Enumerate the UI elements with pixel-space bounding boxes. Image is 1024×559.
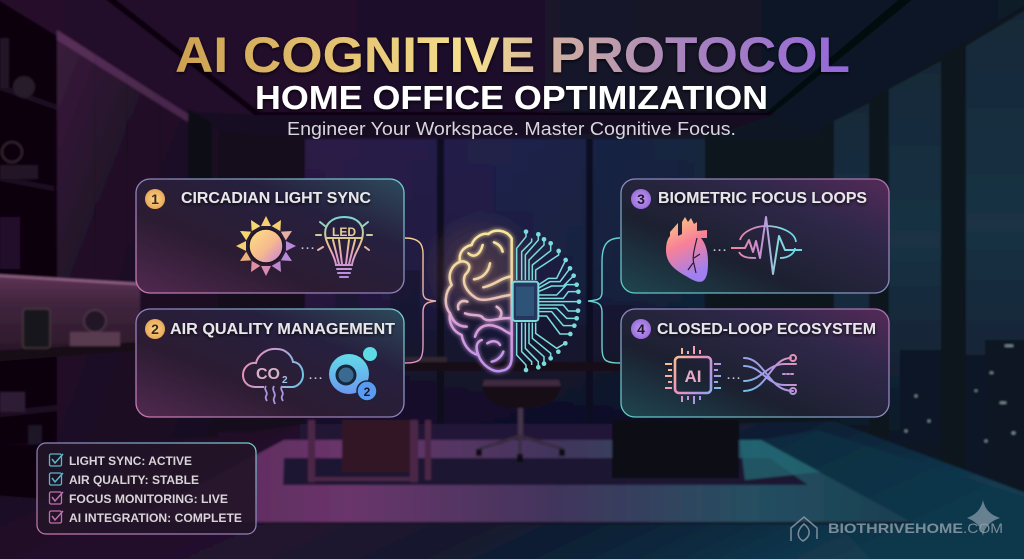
- watermark logo: [791, 500, 1003, 541]
- right wall between windows: [820, 0, 1024, 500]
- icon: O2 molecule: [329, 347, 377, 401]
- badge 4: [631, 319, 651, 339]
- icon: crossing data streams: [744, 355, 796, 394]
- icon: CO2 cloud: 2: [282, 375, 288, 386]
- icon: AI chip: AI: [684, 367, 702, 386]
- badge 3: 3: [637, 191, 645, 207]
- desk: [308, 357, 739, 482]
- icon: sun: [236, 216, 296, 276]
- title: AI COGNITIVE PROTOCOL: [175, 27, 850, 83]
- brain left hemisphere: [446, 231, 512, 371]
- icon: sparkle: [967, 500, 1000, 536]
- brand text: BIOTHRIVEHOME: [828, 520, 963, 536]
- left bracket connector: [405, 238, 436, 363]
- panel: 4 closed-loop ecosystem: [621, 309, 889, 417]
- central brain and circuit icon: [446, 229, 581, 372]
- panel: 1 circadian light sync: [136, 179, 404, 293]
- ceiling lines: [100, 0, 918, 139]
- icon: LED bulb: [316, 217, 372, 277]
- badge 2: 2: [151, 321, 159, 337]
- badge 1: 1: [151, 191, 159, 207]
- icon: CO2 cloud: [243, 349, 303, 404]
- right curtain: [705, 132, 823, 432]
- dots: ...: [301, 240, 314, 252]
- dots: ...: [727, 370, 740, 382]
- dots: ...: [713, 242, 726, 254]
- status: light sync: LIGHT SYNC: ACTIVE: [69, 454, 192, 468]
- lit shelf band: [0, 275, 140, 352]
- status: air quality: AIR QUALITY: STABLE: [69, 473, 199, 487]
- wall niche: [188, 108, 212, 180]
- floor shadow under cards: [300, 424, 710, 440]
- badge 2: [145, 319, 165, 339]
- panel: 2 air quality management: [136, 309, 404, 417]
- icon: heart: [666, 217, 708, 282]
- rug: [130, 440, 911, 524]
- badge 1: [145, 189, 165, 209]
- status: AI integration: AI INTEGRATION: COMPLETE: [69, 511, 242, 525]
- left slatted wall: [57, 30, 218, 445]
- brand suffix: .COM: [963, 520, 1003, 536]
- icon: house with leaf: [791, 517, 817, 541]
- status checklist panel: [37, 443, 256, 534]
- subtitle: HOME OFFICE OPTIMIZATION: [255, 79, 768, 116]
- bookcase: [0, 0, 57, 500]
- badge 3: [631, 189, 651, 209]
- panel: 3 biometric focus loops: [621, 179, 889, 293]
- heading 3: BIOMETRIC FOCUS LOOPS: [658, 190, 867, 207]
- icon: O2 molecule: 2: [364, 385, 371, 399]
- circuit right hemisphere: [513, 229, 581, 372]
- icon: CO2 cloud: CO: [256, 366, 280, 383]
- status: focus monitoring: FOCUS MONITORING: LIVE: [69, 492, 228, 506]
- right window panes: [834, 5, 1024, 496]
- heading 2: AIR QUALITY MANAGEMENT: [170, 321, 396, 338]
- left curtain: [218, 132, 305, 432]
- heading 4: CLOSED-LOOP ECOSYSTEM: [657, 321, 876, 338]
- chair: [476, 380, 565, 462]
- icon: AI chip: [665, 346, 721, 404]
- tagline: Engineer Your Workspace. Master Cognitive Focus.: [287, 119, 736, 139]
- counter: [0, 342, 140, 362]
- icon: LED bulb: LED: [332, 225, 356, 239]
- icon: brain wave: [731, 217, 802, 274]
- dots: ...: [309, 370, 322, 382]
- badge 4: 4: [637, 321, 645, 337]
- center window: [285, 139, 705, 430]
- right bracket connector: [588, 238, 620, 363]
- heading 1: CIRCADIAN LIGHT SYNC: [181, 190, 371, 207]
- floor: [0, 421, 1024, 559]
